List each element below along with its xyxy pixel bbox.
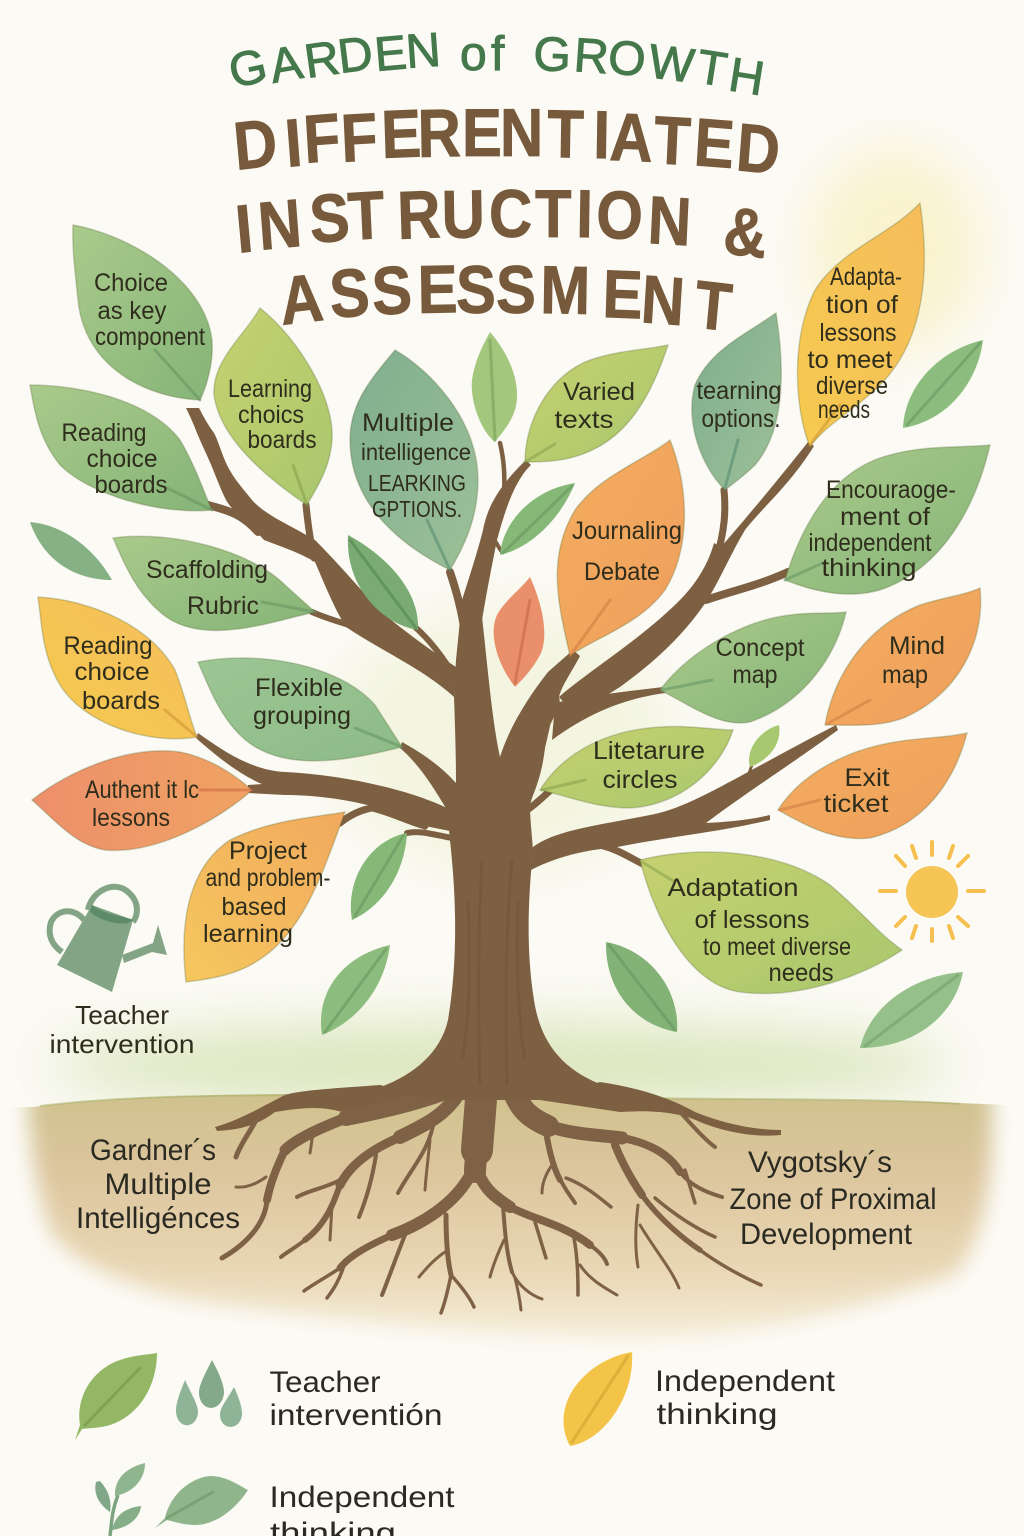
leaf: varied texts: Varied [563, 378, 635, 406]
legend: sprig and leaf independent thinking: Independent [270, 1481, 455, 1514]
leaf: adaptation of lessons yellow: Adapta- [830, 263, 902, 291]
leaf: encouragement of independent thinking: Encouraoge- [826, 476, 956, 504]
leaf: learning options [692, 313, 782, 490]
label: teacher intervention [50, 1000, 194, 1059]
leaf: varied texts [525, 345, 668, 462]
legend: leaf and drops teacher intervention [75, 1353, 442, 1440]
legend: yellow leaf independent thinking: Independent [655, 1365, 836, 1398]
leaf: small green left [30, 522, 112, 580]
leaf: mind map: map [882, 661, 928, 689]
icon: sun [880, 842, 984, 941]
leaf: multiple intelligence learning options: intelligence [361, 439, 471, 465]
leaf: multiple intelligence learning options: GPTIONS. [372, 496, 462, 522]
leaf: small green bottom right [860, 972, 963, 1048]
leaf: choice as key component: as key [98, 297, 167, 325]
leaf: project and problem based learning [184, 812, 345, 982]
leaf: journaling debate: Journaling [572, 517, 682, 545]
leaf: mind map: Mind [889, 632, 945, 660]
leaf: adaptation of lessons yellow [798, 203, 924, 447]
leaf: learning choice boards: boards [248, 426, 316, 454]
leaf: adaptation of lessons lower: to meet diverse [703, 933, 851, 961]
leaf: mind map [825, 588, 981, 725]
leaf: small green right [903, 340, 983, 428]
leaf: adaptation of lessons yellow: lessons [820, 319, 896, 347]
label: vygotsky zone of proximal development: Development [740, 1218, 913, 1251]
leaf: authentic lessons: Authent it lc [85, 776, 199, 804]
leaf: journaling debate [557, 440, 684, 656]
legend: leaf and drops teacher intervention: Teacher [270, 1366, 381, 1399]
leaf: scaffolding rubric [113, 536, 315, 630]
leaf: literature circles [540, 727, 733, 808]
leaf: multiple intelligence learning options: Multiple [362, 409, 454, 437]
label: gardner's multiple intelligences [76, 1134, 240, 1235]
leaf: adaptation of lessons yellow: tion of [826, 291, 898, 319]
leaf: encouragement of independent thinking: independent [808, 529, 932, 557]
leaf: reading choice boards green: boards [94, 471, 168, 499]
leaf: flexible grouping: grouping [253, 702, 351, 730]
leaf: small top centre [472, 332, 517, 442]
icon: watering can [50, 887, 167, 992]
heading: differentiated instruction and assessment: INSTRUCTION& [232, 175, 771, 273]
tree trunk and branches [186, 408, 838, 1100]
leaf: reading choice boards green: choice [86, 445, 158, 473]
leaf: small green below varied [500, 483, 575, 555]
leaf: learning choice boards [214, 308, 332, 505]
leaf: small green below project [321, 945, 390, 1035]
heading: differentiated instruction and assessment: ASSESSMENT [276, 251, 735, 346]
leaf: adaptation of lessons lower [640, 852, 902, 994]
legend: yellow leaf independent thinking: thinking [656, 1398, 778, 1431]
leaf: encouragement of independent thinking: ment of [840, 503, 930, 531]
leaf: adaptation of lessons lower: of lessons [694, 906, 810, 934]
label: vygotsky zone of proximal development: Vygotsky´s [748, 1146, 892, 1179]
soil ground [28, 1070, 992, 1337]
legend: sprig and leaf independent thinking [95, 1463, 455, 1536]
leaf: multiple intelligence learning options [350, 350, 478, 570]
leaf: authentic lessons: lessons [92, 804, 170, 832]
leaf: choice as key component [73, 225, 212, 400]
label: gardner's multiple intelligences: Intelligénces [76, 1202, 240, 1235]
leaf: small red [494, 577, 544, 687]
leaf: adaptation of lessons yellow: diverse [816, 372, 888, 400]
leaf: learning options: options. [702, 405, 780, 433]
leaf: adaptation of lessons yellow: to meet [808, 346, 893, 374]
heading: differentiated instruction and assessment: DIFFERENTIATED [230, 94, 783, 189]
leaf: choice as key component: component [95, 323, 205, 351]
label: gardner's multiple intelligences: Gardner´s [90, 1134, 216, 1167]
leaf: scaffolding rubric: Rubric [187, 592, 259, 620]
leaf: reading choice boards orange: choice [74, 658, 150, 686]
leaf: reading choice boards orange [38, 597, 197, 739]
leaf: learning choice boards: Learning [228, 375, 312, 403]
leaf: adaptation of lessons lower: needs [768, 959, 834, 987]
leaf: small green near project [351, 833, 407, 920]
leaf: varied texts: texts [554, 406, 614, 434]
leaf: literature circles: Litetarure [593, 737, 705, 765]
legend: yellow leaf independent thinking [563, 1352, 836, 1446]
leaf: exit ticket: ticket [824, 790, 889, 818]
heading: differentiated instruction and assessment [230, 94, 783, 346]
leaf: concept map: map [732, 661, 778, 689]
leaf: flexible grouping: Flexible [255, 674, 343, 702]
leaf: small green below multiple [348, 535, 418, 630]
leaf: concept map: Concept [716, 634, 805, 662]
leaf: exit ticket [778, 733, 967, 839]
leaf: adaptation of lessons lower: Adaptation [668, 874, 798, 902]
leaf: encouragement of independent thinking [785, 445, 990, 594]
leaf: encouragement of independent thinking: thinking [822, 554, 916, 582]
leaf: concept map [660, 612, 846, 723]
leaf: reading choice boards orange: boards [82, 687, 160, 715]
leaf: choice as key component: Choice [94, 269, 168, 297]
leaf: flexible grouping [198, 658, 402, 761]
leaf: learning choice boards: choics [238, 401, 304, 429]
label: teacher intervention: intervention [50, 1029, 194, 1059]
leaf: journaling debate: Debate [584, 558, 660, 586]
leaf: tiny green [749, 725, 779, 767]
leaf: literature circles: circles [602, 766, 678, 794]
leaf: authentic lessons [32, 751, 252, 850]
leaf: reading choice boards green [30, 385, 212, 511]
leaf: project and problem based learning: Project [229, 837, 307, 865]
leaf: scaffolding rubric: Scaffolding [146, 556, 268, 584]
label: vygotsky zone of proximal development [730, 1146, 936, 1251]
leaf: project and problem based learning: learning [203, 920, 293, 948]
label: teacher intervention: Teacher [75, 1000, 169, 1030]
leaf: learning options: tearning [696, 377, 782, 405]
label: vygotsky zone of proximal development: Zone of Proximal [730, 1183, 936, 1216]
leaf: reading choice boards orange: Reading [64, 632, 152, 660]
leaf: multiple intelligence learning options: LEARKING [368, 470, 466, 496]
leaf: small green centre right [606, 942, 677, 1032]
label: gardner's multiple intelligences: Multiple [104, 1168, 212, 1201]
leaf: reading choice boards green: Reading [62, 419, 146, 447]
leaf: project and problem based learning: based [222, 893, 286, 921]
roots [215, 1082, 781, 1313]
leaf: exit ticket: Exit [844, 764, 890, 792]
title: garden of growth: GARDENofGROWTH [224, 24, 768, 106]
leaf: project and problem based learning: and problem- [206, 864, 330, 892]
legend: leaf and drops teacher intervention: interventión [270, 1399, 442, 1432]
leaf: adaptation of lessons yellow: needs [818, 396, 870, 424]
